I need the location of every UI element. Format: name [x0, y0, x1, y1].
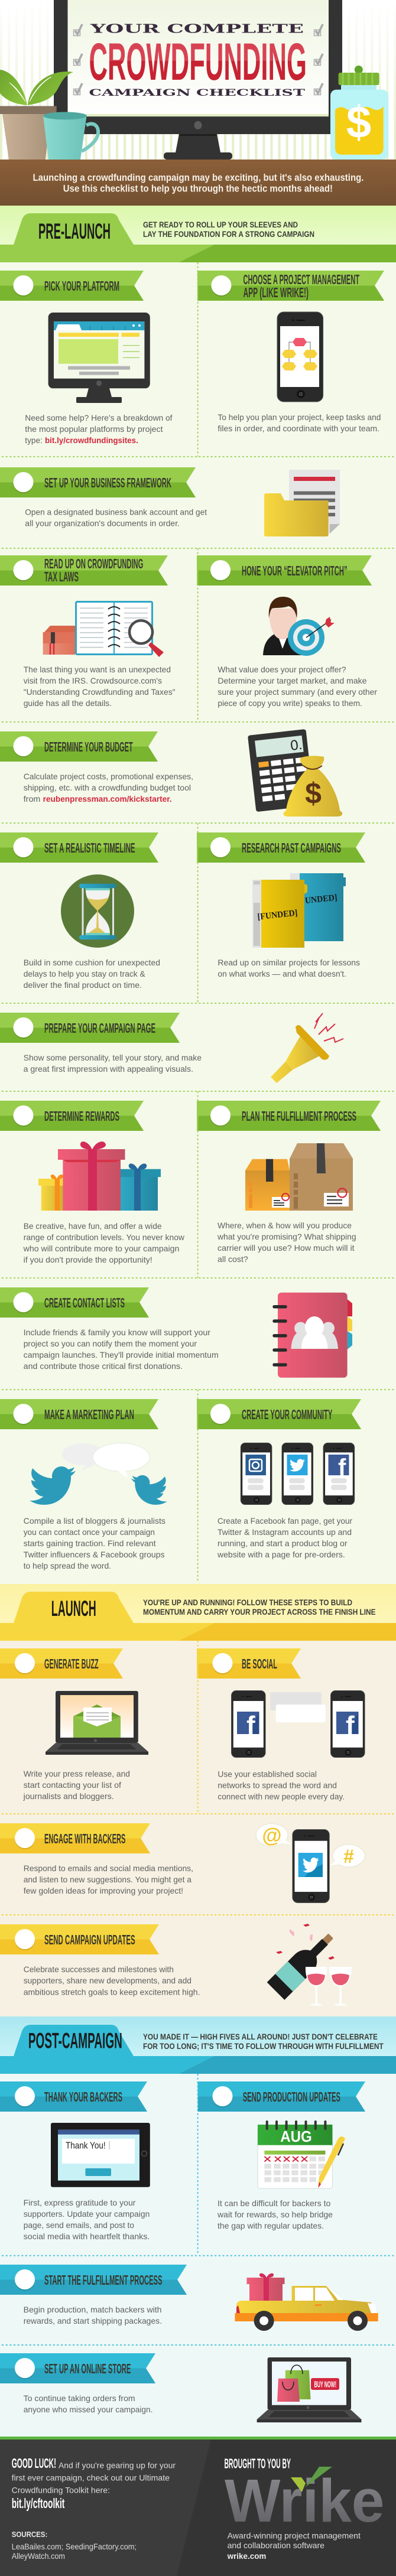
text: realistic timeline: delays to help you stay on track &: [24, 969, 145, 978]
intro band: Use this checklist to help you through the hectic months ahead!: [63, 183, 333, 194]
panel: project management app: [197, 271, 384, 433]
text: research past campaigns: [218, 958, 360, 978]
ribbon: plan fulfillment: [197, 1101, 381, 1131]
ribbon: engage with backers: ENGAGE WITH BACKERS: [44, 1831, 125, 1846]
section header: launch: LAUNCH: [51, 1596, 96, 1621]
icon: three social phones: f: [338, 1455, 346, 1481]
footer text: good luck: Crowdfunding Toolkit here:: [12, 2486, 110, 2495]
text: elevator pitch: sure your project summary (and every other: [218, 687, 377, 697]
text: start fulfillment: Begin production, match backers with: [24, 2305, 162, 2314]
panel: contact lists: [0, 1287, 352, 1378]
panel: pick your platform: [0, 271, 173, 445]
hero panel: desk scene with monitor: [0, 0, 396, 160]
monitor: [54, 0, 342, 160]
text: determine rewards: Be creative, have fun, and offer a wide: [24, 1221, 162, 1231]
text: campaign page: Show some personality, tell your story, and make: [24, 1053, 202, 1062]
panel: determine budget: [0, 729, 342, 817]
text: plan fulfillment: carrier will you use? How much will it: [218, 1243, 355, 1253]
footer: brought to you by wrike: [225, 2456, 384, 2561]
ribbon: online store: [0, 2353, 155, 2383]
section header: pre-launch: [0, 206, 396, 262]
ribbon: thank your backers: THANK YOUR BACKERS: [44, 2089, 122, 2105]
text: realistic timeline: deliver the final product on time.: [24, 980, 142, 990]
footer text: wrike description: [227, 2531, 361, 2561]
panel: generate buzz: [0, 1648, 148, 1801]
icon: megaphone: [271, 1013, 343, 1083]
text: research past campaigns: on what works — and what doesn't.: [218, 969, 346, 978]
text: create community: [217, 1516, 352, 1559]
text: determine rewards: range of contribution levels. You never know: [24, 1232, 185, 1242]
text: thank your backers: supporters. Update your campaign: [24, 2209, 150, 2219]
panel: business framework: [0, 467, 340, 536]
text: generate buzz: start contacting your list of: [24, 1780, 121, 1790]
panel: engage with backers: [0, 1823, 365, 1903]
panel: research past campaigns: [197, 832, 365, 978]
text: determine rewards: [23, 1221, 185, 1264]
icon: champagne bottle and glasses: [267, 1924, 352, 2006]
footer text: wrike description: Award-winning project management: [228, 2531, 361, 2541]
text: elevator pitch: piece of copy you write) speaks to them.: [218, 698, 362, 708]
text: pick your platform: [25, 413, 173, 445]
footer text: good luck: And if you're gearing up for your: [59, 2461, 176, 2470]
ribbon: determine budget: [0, 731, 158, 762]
panel: online store: [0, 2353, 362, 2422]
intro band: [0, 160, 396, 206]
text: project management app: [218, 412, 381, 433]
icon: folder with documents: [264, 470, 340, 536]
icon: calculator and money bag: $: [305, 777, 322, 810]
ribbon: contact lists: CREATE CONTACT LISTS: [44, 1295, 125, 1310]
text: campaign updates: supporters, share new developments, and add: [24, 1976, 191, 1985]
text: create community: Twitter & Instagram accounts up and: [218, 1527, 352, 1537]
icon: tablet with thank you message: [51, 2123, 150, 2187]
ribbon: campaign updates: [0, 1924, 159, 1954]
text: be social: Use your established social: [218, 1769, 317, 1778]
footer text: good luck: GOOD LUCK!: [12, 2455, 56, 2471]
ribbon: create community: [197, 1399, 361, 1429]
icon: jar of money: $: [346, 97, 371, 148]
icon: calendar and pencil: AUG: [280, 2128, 312, 2145]
ribbon: tax laws: TAX LAWS: [44, 569, 79, 584]
text: marketing plan: Twitter influencers & Facebook groups: [24, 1550, 165, 1559]
text: generate buzz: [23, 1769, 130, 1801]
icon: funded folders: [FUNDED]: [257, 908, 298, 922]
panel: start fulfillment: [0, 2265, 378, 2331]
icon: man with target: [263, 597, 335, 656]
text: be social: connect with new people every day.: [218, 1791, 345, 1801]
icon: jar of money: [330, 66, 388, 160]
footer: brought to you by wrike: BROUGHT TO YOU BY: [225, 2456, 291, 2471]
text: business framework: [25, 508, 207, 528]
ribbon: realistic timeline: [0, 832, 158, 863]
title: CAMPAIGN CHECKLIST: [89, 87, 305, 98]
icon: calculator and money bag: 0.: [290, 737, 303, 754]
text: online store: To continue taking orders from: [24, 2393, 135, 2403]
icon: laptop with shopping bags: BUY NOW!: [314, 2380, 336, 2389]
ribbon: project management app: [197, 271, 384, 301]
launch section background: [0, 1641, 396, 2016]
panel: campaign page: [0, 1013, 343, 1083]
ribbon: marketing plan: [0, 1399, 158, 1429]
sub-heading: pre-launch: [143, 220, 314, 239]
text: engage with backers: Respond to emails and social media mentions,: [24, 1863, 193, 1873]
ribbon: campaign updates: SEND CAMPAIGN UPDATES: [44, 1932, 135, 1947]
footer text: wrike description: and collaboration software: [228, 2541, 324, 2550]
sub-heading: pre-launch: GET READY TO ROLL UP YOUR SLEEVES AND: [143, 220, 298, 229]
text: create community: running, and start a product blog or: [218, 1539, 348, 1548]
text: campaign updates: ambitious stretch goals to keep excitement high.: [24, 1988, 200, 1997]
panel: realistic timeline: [0, 832, 160, 990]
text: marketing plan: [24, 1516, 165, 1570]
panel: thank your backers: [0, 2081, 150, 2241]
text: realistic timeline: [24, 958, 160, 990]
ribbon: engage with backers: [0, 1823, 150, 1853]
text: plan fulfillment: what you're promising? What shipping: [217, 1232, 356, 1241]
icon: shipping boxes: [245, 1143, 353, 1211]
text: production updates: [217, 2198, 333, 2230]
footer text: good luck: [12, 2455, 176, 2511]
footer text: sources: [12, 2530, 137, 2561]
icon: pickup truck with gift: [235, 2273, 378, 2331]
ribbon: contact lists: [0, 1287, 149, 1318]
text: determine rewards: who will contribute more to your campaign: [23, 1244, 179, 1253]
text: elevator pitch: Determine your target market, and make: [218, 676, 367, 685]
text: pick your platform: Need some help? Here's a breakdown of: [25, 413, 173, 422]
post-campaign section background: [0, 2074, 396, 2437]
text: tax laws: visit from the IRS. Crowdsource.com's: [24, 676, 162, 685]
text: determine rewards: if you don't provide the opportunity!: [24, 1255, 152, 1264]
text: marketing plan: Compile a list of bloggers & journalists: [24, 1516, 165, 1526]
ribbon: business framework: [0, 467, 196, 497]
text: project management app: files in order, and coordinate with your team.: [218, 424, 379, 433]
icon: funded folders: [252, 873, 346, 948]
text: business framework: all your organization's documents in order.: [25, 519, 180, 528]
panel: marketing plan: [0, 1399, 167, 1570]
text: research past campaigns: Read up on similar projects for lessons: [218, 958, 360, 967]
text: thank your backers: [24, 2198, 150, 2241]
text: production updates: wait for rewards, so help bridge: [217, 2210, 333, 2219]
title: [89, 21, 307, 98]
ribbon: marketing plan: MAKE A MARKETING PLAN: [44, 1407, 134, 1422]
icon: hourglass: [61, 874, 134, 948]
text: tax laws: guide has all the details.: [24, 698, 112, 708]
icon: phone with twitter and bubbles: @: [262, 1824, 282, 1847]
icon: gift boxes: [38, 1141, 161, 1211]
text: contact lists: campaign launches. They'll provide initial momentum: [24, 1350, 219, 1359]
text: determine budget: shipping, etc. with a crowdfunding budget tool: [24, 783, 191, 792]
footer text: wrike description: wrike.com: [227, 2551, 266, 2561]
text: campaign page: [24, 1053, 202, 1074]
icon: phone with twitter and bubbles: [256, 1824, 365, 1903]
text: pick your platform: bit.ly/crowdfundingsites.: [45, 435, 138, 445]
text: tax laws: The last thing you want is an unexpected: [24, 665, 171, 674]
icon: coffee mug: [43, 112, 98, 160]
text: elevator pitch: [218, 665, 377, 708]
text: thank your backers: page, send emails, and post to: [24, 2220, 134, 2230]
sub-heading: launch: [143, 1598, 376, 1616]
icon: calendar and pencil: [258, 2122, 345, 2188]
panel: create community: [197, 1399, 361, 1559]
heading: post-campaign: POST-CAMPAIGN: [28, 2029, 122, 2053]
icon: tablet with thank you message: Thank You!: [66, 2141, 106, 2151]
section header: launch: [0, 1584, 396, 1641]
ribbon: pick your platform: PICK YOUR PLATFORM: [44, 278, 119, 294]
section header: pre-launch: PRE-LAUNCH: [38, 219, 111, 243]
ribbon: be social: BE SOCIAL: [242, 1656, 277, 1671]
icon: twitter birds with speech bubbles: [30, 1443, 167, 1505]
text: marketing plan: you can contact once your campaign: [24, 1527, 155, 1537]
text: determine budget: Calculate project costs, promotional expenses,: [24, 772, 193, 781]
text: thank your backers: social media with heartfelt thanks.: [24, 2232, 150, 2241]
text: engage with backers: and listen to new suggestions. You might get a: [24, 1875, 191, 1884]
ribbon: tax laws: READ UP ON CROWDFUNDING: [44, 556, 143, 571]
icon: funded folders: [FUNDED]: [297, 893, 337, 906]
text: elevator pitch: What value does your project offer?: [218, 665, 346, 674]
ribbon: realistic timeline: SET A REALISTIC TIMELINE: [44, 840, 135, 856]
icon: phone with twitter and bubbles: #: [343, 1846, 354, 1867]
text: pick your platform: type:: [25, 435, 43, 445]
ribbon: start fulfillment: START THE FULFILLMENT PROCESS: [44, 2272, 162, 2288]
text: online store: [24, 2393, 153, 2414]
icon: potted plant: [0, 70, 73, 160]
footer text: sources: SOURCES:: [12, 2530, 47, 2539]
text: project management app: To help you plan your project, keep tasks and: [218, 412, 381, 422]
ribbon: campaign page: PREPARE YOUR CAMPAIGN PAGE: [44, 1020, 155, 1036]
icon: phones chatting on facebook: f: [346, 1711, 355, 1740]
text: start fulfillment: [24, 2305, 162, 2325]
ribbon: elevator pitch: [197, 555, 372, 586]
panel: elevator pitch: [197, 555, 377, 708]
sub-heading: pre-launch: LAY THE FOUNDATION FOR A STRONG CAMPAIGN: [143, 229, 314, 239]
text: production updates: the gap with regular updates.: [218, 2221, 324, 2230]
text: engage with backers: [24, 1863, 193, 1895]
text: plan fulfillment: all cost?: [218, 1254, 248, 1264]
text: create community: Create a Facebook fan page, get your: [218, 1516, 352, 1526]
text: determine budget: [24, 772, 193, 804]
ribbon: research past campaigns: [197, 832, 365, 863]
text: plan fulfillment: Where, when & how will you produce: [218, 1221, 352, 1230]
text: tax laws: "Understanding Crowdfunding and Taxes": [24, 687, 176, 697]
panel: tax laws: [0, 555, 176, 708]
panel: campaign updates: [0, 1924, 352, 2006]
icon: calculator and money bag: [248, 729, 342, 817]
ribbon: business framework: SET UP YOUR BUSINESS FRAMEWORK: [44, 475, 171, 490]
panel: production updates: [197, 2081, 365, 2230]
text: engage with backers: few golden ideas for improving your project!: [24, 1886, 183, 1895]
text: campaign page: a great first impression with appealing visuals.: [24, 1064, 193, 1074]
panel: plan fulfillment: [197, 1101, 381, 1264]
text: generate buzz: journalists and bloggers.: [23, 1791, 114, 1801]
text: contact lists: [24, 1328, 219, 1371]
footer panel: [0, 2437, 396, 2576]
text: production updates: It can be difficult for backers to: [218, 2198, 331, 2208]
text: contact lists: and contribute those critical first donations.: [24, 1361, 183, 1371]
text: realistic timeline: Build in some cushion for unexpected: [24, 958, 160, 967]
ribbon: determine rewards: DETERMINE REWARDS: [44, 1108, 119, 1124]
text: determine budget: reubenpressman.com/kickstarter.: [43, 794, 172, 804]
icon: desktop monitor with website: [48, 313, 150, 403]
footer text: sources: AlleyWatch.com: [12, 2551, 65, 2561]
text: campaign updates: Celebrate successes and milestones with: [24, 1964, 174, 1974]
text: determine budget: from: [24, 794, 40, 804]
sub-heading: launch: YOU'RE UP AND RUNNING! FOLLOW THESE STEPS TO BUILD: [143, 1598, 352, 1607]
text: be social: networks to spread the word and: [218, 1781, 337, 1790]
text: online store: anyone who missed your campaign.: [24, 2405, 153, 2414]
text: campaign updates: [24, 1964, 200, 1997]
ribbon: project management app: APP (LIKE WRIKE!): [244, 285, 309, 300]
ribbon: campaign page: [0, 1013, 180, 1043]
text: business framework: Open a designated business bank account and get: [25, 508, 207, 517]
text: start fulfillment: rewards, and start shipping packages.: [24, 2316, 162, 2325]
text: marketing plan: to help spread the word.: [24, 1561, 111, 1570]
panel: be social: [197, 1648, 365, 1801]
footer text: good luck: bit.ly/cftoolkit: [12, 2496, 65, 2511]
icon: phones chatting on facebook: f: [246, 1711, 255, 1740]
ribbon: start fulfillment: [0, 2265, 187, 2295]
ribbon: pick your platform: [0, 271, 144, 301]
ribbon: tax laws: [0, 555, 168, 586]
text: thank your backers: First, express gratitude to your: [24, 2198, 136, 2207]
icon: checkmarks: [73, 24, 323, 95]
footer text: sources: LeaBailes.com; SeedingFactory.com;: [12, 2542, 137, 2551]
icon: phone with org chart: [277, 312, 323, 402]
logo: wrike: Wrike: [225, 2467, 384, 2535]
ribbon: determine budget: DETERMINE YOUR BUDGET: [44, 739, 133, 754]
section header: post-campaign: [0, 2016, 396, 2074]
icon: address book: [274, 1293, 352, 1378]
ribbon: determine rewards: [0, 1101, 144, 1131]
sub-heading: post-campaign: [143, 2032, 384, 2051]
ribbon: generate buzz: [0, 1648, 123, 1679]
text: tax laws: [24, 665, 176, 708]
text: create community: website with a page for pre-orders.: [217, 1550, 345, 1559]
icon: notebook and magnifier: [43, 601, 164, 657]
ribbon: thank your backers: [0, 2081, 147, 2112]
text: plan fulfillment: [217, 1221, 356, 1264]
ribbon: production updates: [197, 2081, 365, 2112]
text: generate buzz: Write your press release, and: [24, 1769, 130, 1778]
ribbon: online store: SET UP AN ONLINE STORE: [44, 2361, 131, 2376]
text: be social: [218, 1769, 345, 1801]
title: YOUR COMPLETE: [89, 21, 304, 35]
panel: determine rewards: [0, 1101, 185, 1264]
text: contact lists: Include friends & family you know will support your: [24, 1328, 210, 1337]
icon: laptop with shopping bags: [257, 2357, 362, 2422]
text: contact lists: project so you can notify them the moment your: [24, 1339, 197, 1348]
footer text: good luck: first ever campaign, check out our Ultimate: [12, 2473, 170, 2483]
icon: laptop with envelope: [46, 1691, 148, 1755]
icon: phones chatting on facebook: [231, 1690, 365, 1758]
ribbon: generate buzz: GENERATE BUZZ: [44, 1656, 99, 1671]
text: pick your platform: the most popular platforms by project: [25, 424, 163, 434]
ribbon: be social: [197, 1648, 301, 1679]
text: marketing plan: starts gaining traction. Find relevant: [24, 1539, 156, 1548]
icon: three social phones: [241, 1443, 355, 1505]
